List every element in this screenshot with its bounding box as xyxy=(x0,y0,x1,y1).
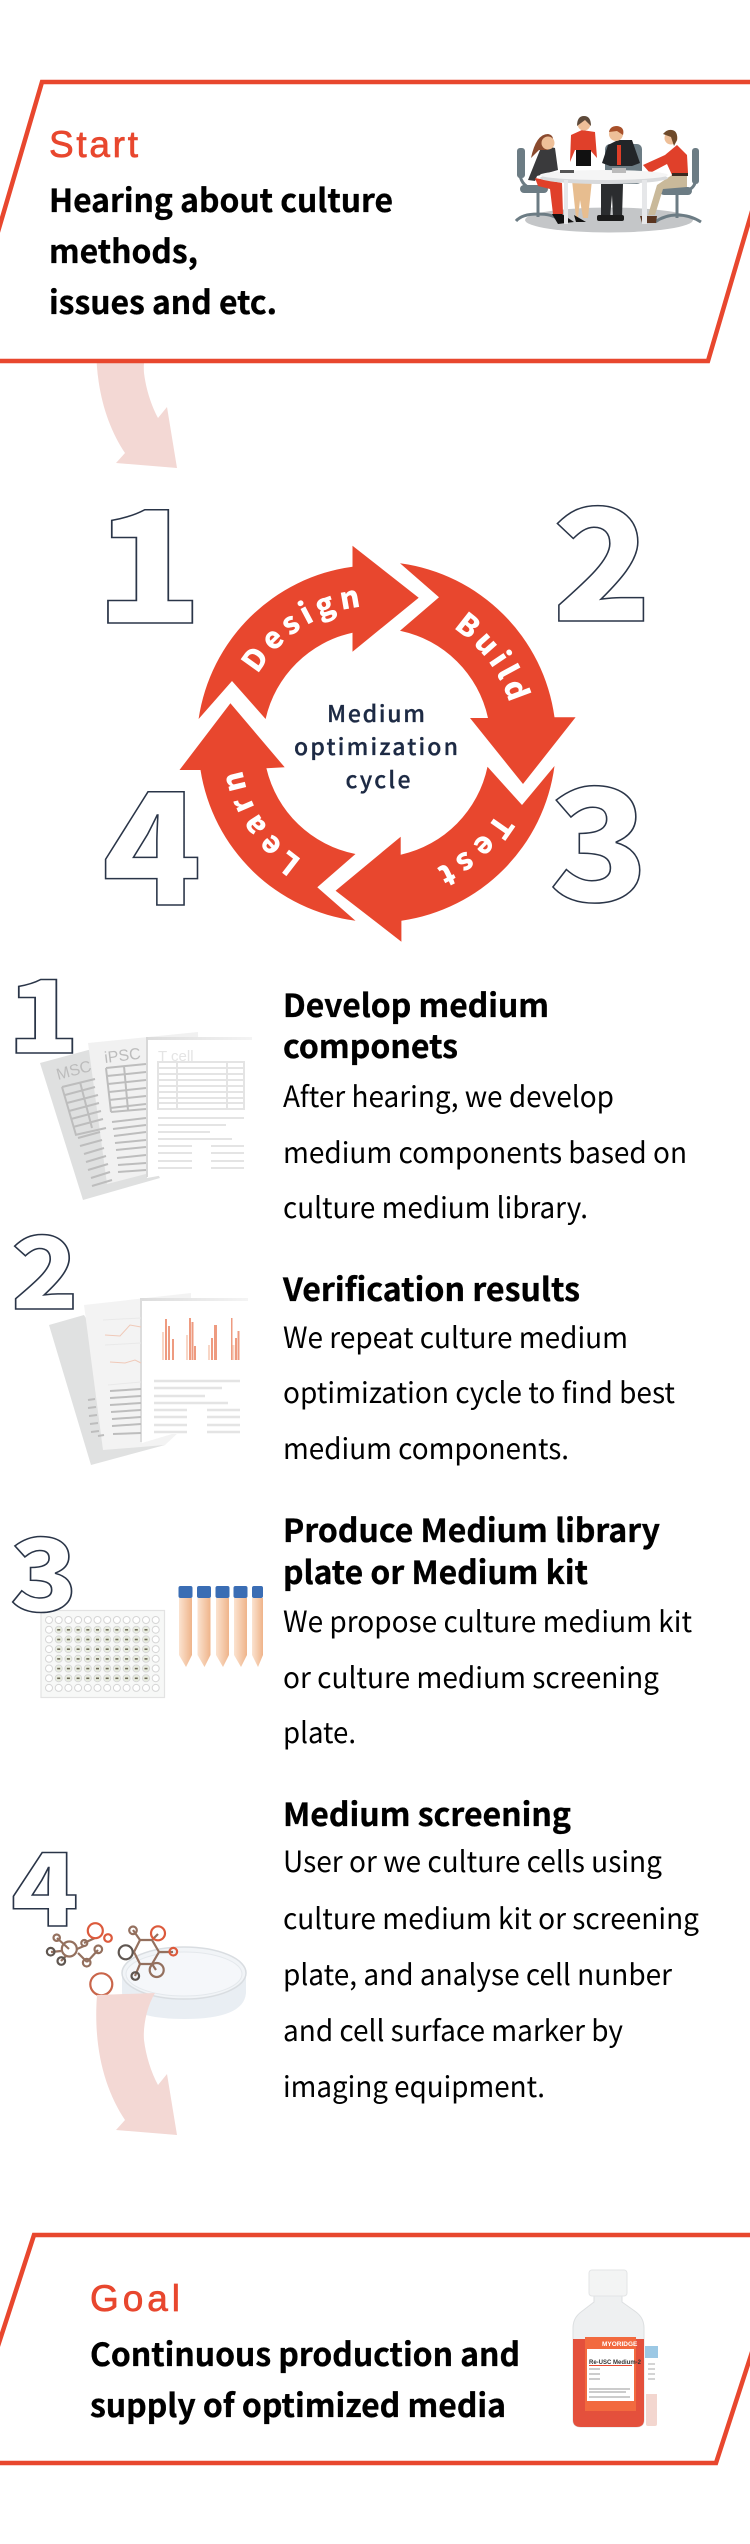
man right xyxy=(643,145,688,175)
outlined number 2: 2 xyxy=(11,1192,79,1338)
step 1 body: culture medium library. xyxy=(283,1185,588,1227)
icon: meeting people around table xyxy=(516,116,701,232)
arrow: Design xyxy=(198,546,419,719)
goal description xyxy=(90,2330,520,2427)
step 2 body xyxy=(283,1315,675,1468)
outlined number 2: 2 xyxy=(552,441,652,667)
step 4 body: and cell surface marker by xyxy=(283,2008,623,2050)
step 4 body: imaging equipment. xyxy=(283,2064,545,2106)
arrow: Design: Design xyxy=(240,590,360,672)
arrow: Learn xyxy=(180,703,356,921)
start description xyxy=(49,176,393,324)
icon: medium bottle and tube: Re-USC Medium-2 xyxy=(589,2360,642,2366)
arrow: step 4 to goal xyxy=(96,1993,177,2135)
cycle center label: Medium xyxy=(327,695,425,729)
icon: culture medium documents xyxy=(40,1032,254,1200)
outlined number 1: 1 xyxy=(94,443,203,668)
step 2 body: We repeat culture medium xyxy=(283,1315,628,1357)
cycle center label xyxy=(294,695,458,795)
cycle center label: optimization xyxy=(294,728,458,762)
step 4 body: plate, and analyse cell nunber xyxy=(283,1952,673,1994)
step 4 heading: Medium screening xyxy=(283,1790,571,1836)
icon: medium bottle and tube: MYORIDGE xyxy=(602,2341,638,2348)
step 4 body: culture medium kit or screening xyxy=(283,1896,699,1938)
arrow: Build xyxy=(400,563,576,784)
step 1 body xyxy=(283,1074,687,1227)
start description: methods, xyxy=(49,227,198,273)
step 1 heading: Develop medium xyxy=(283,981,549,1027)
step 3 heading: Produce Medium library xyxy=(283,1506,660,1552)
panel: start xyxy=(0,82,750,361)
step 4 body: User or we culture cells using xyxy=(283,1839,662,1881)
woman left xyxy=(528,147,558,181)
arrow: Test xyxy=(336,766,554,942)
cycle diagram xyxy=(94,441,652,951)
start description: issues and etc. xyxy=(49,278,277,324)
step 1 heading: componets xyxy=(283,1022,458,1068)
start label: Start xyxy=(49,124,139,165)
icon: culture medium documents: T cell xyxy=(158,1048,194,1065)
step 4 body xyxy=(283,1839,699,2106)
icon: molecules xyxy=(47,1923,177,1995)
goal label: Goal xyxy=(90,2278,180,2319)
man center xyxy=(602,140,640,166)
step 3 body: or culture medium screening xyxy=(283,1655,659,1697)
cycle center label: cycle xyxy=(346,761,410,795)
step 3 body: plate. xyxy=(283,1710,356,1752)
table xyxy=(540,172,668,184)
goal description: supply of optimized media xyxy=(90,2381,506,2427)
step 1 body: After hearing, we develop xyxy=(283,1074,614,1116)
outlined number 1: 1 xyxy=(7,936,80,1082)
panel: goal xyxy=(0,2235,750,2463)
step 1 xyxy=(7,936,687,1227)
step 1 body: medium components based on xyxy=(283,1130,687,1172)
step 3 heading xyxy=(283,1506,660,1594)
icon: tubes xyxy=(178,1586,263,1667)
step 1 heading xyxy=(283,981,549,1068)
outlined number 4: 4 xyxy=(11,1809,79,1955)
step 2 xyxy=(11,1192,675,1468)
outlined number 3: 3 xyxy=(10,1494,78,1640)
step 3 heading: plate or Medium kit xyxy=(283,1548,588,1594)
icon: culture medium documents: MSC xyxy=(55,1058,93,1084)
arrow: start to cycle xyxy=(96,326,177,468)
step 2 body: medium components. xyxy=(283,1426,569,1468)
step 3 body: We propose culture medium kit xyxy=(283,1599,692,1641)
icon: result documents with charts xyxy=(49,1293,250,1465)
icon: culture medium documents: iPSC xyxy=(103,1046,142,1067)
arrow: Learn: Learn xyxy=(226,772,300,876)
outlined number 3: 3 xyxy=(549,721,649,947)
arrow: Build: Build xyxy=(455,612,532,701)
step 3 body xyxy=(283,1599,692,1752)
icon: petri dish xyxy=(122,1947,246,2019)
step 3 xyxy=(10,1494,692,1752)
step 2 heading: Verification results xyxy=(282,1265,580,1311)
standing woman xyxy=(570,130,597,162)
icon: medium bottle and tube xyxy=(573,2270,658,2427)
step 2 body: optimization cycle to find best xyxy=(283,1370,675,1412)
step 4 xyxy=(11,1790,699,2135)
icon: well plate xyxy=(41,1610,164,1698)
arrow: Test: Test xyxy=(437,818,516,886)
goal description: Continuous production and xyxy=(90,2330,520,2376)
start description: Hearing about culture xyxy=(49,176,393,222)
outlined number 4: 4 xyxy=(102,725,202,951)
